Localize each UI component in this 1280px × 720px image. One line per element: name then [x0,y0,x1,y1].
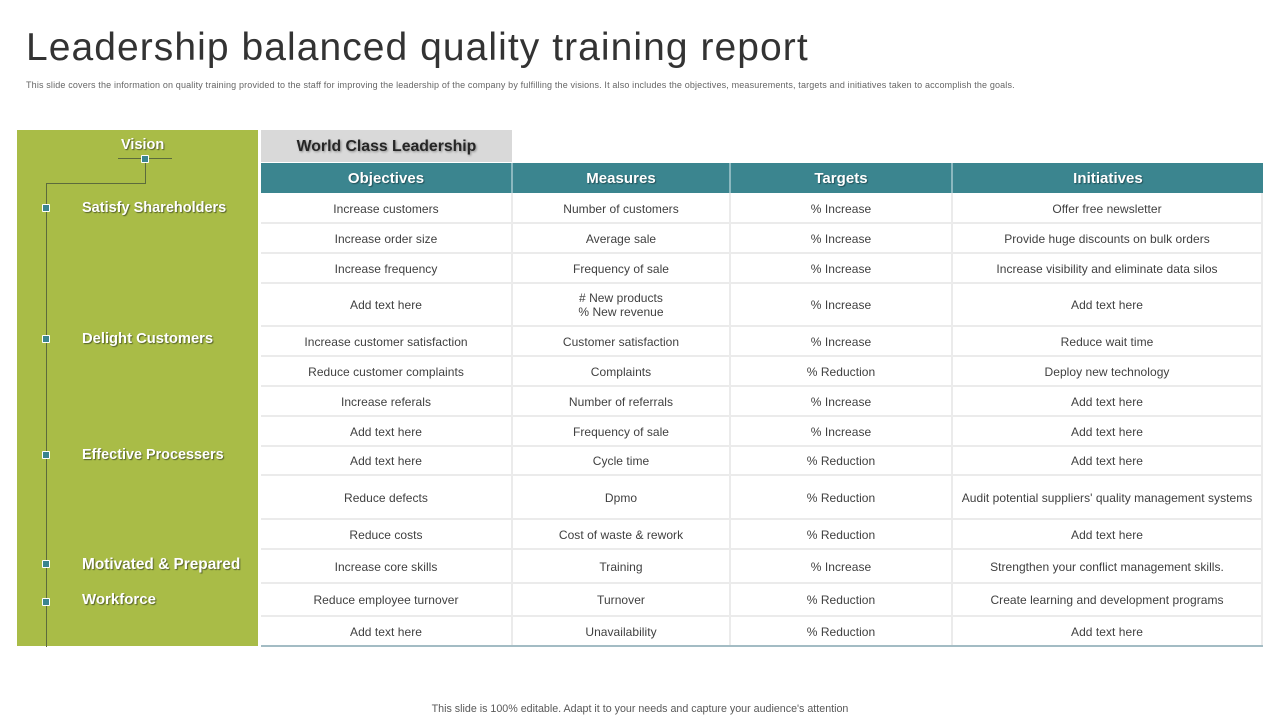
row 6 [261,356,1263,387]
row 6: % Reduction [807,364,875,378]
row 2: Provide huge discounts on bulk orders [1004,232,1210,246]
vision heading: Vision [121,137,164,153]
row 10: Dpmo [605,490,637,504]
row 13 [261,583,1263,617]
row 4: % New revenue [578,305,664,319]
row 3: Increase frequency [335,262,437,276]
row 14: Add text here [350,624,422,638]
header: targets [731,163,953,193]
row 12 [261,549,1263,584]
row 6: Deploy new technology [1045,364,1169,378]
row 11: Reduce costs [349,528,423,542]
row 9: Add text here [1071,454,1143,468]
row 8 [261,416,1263,447]
row 12: Strengthen your conflict management skills. [990,560,1224,574]
row 10 [261,475,1263,520]
row 4: Add text here [1071,298,1143,312]
row 10: Audit potential suppliers' quality management systems [962,490,1252,504]
row 3 [261,253,1263,284]
node: effective processers [42,451,50,459]
row 2 [261,223,1263,254]
row 13: Reduce employee turnover [313,593,459,607]
label: workforce: Workforce [82,591,156,608]
row 11: Cost of waste & rework [559,528,683,542]
row 12: Increase core skills [335,560,437,574]
row 7: Add text here [1071,394,1143,408]
row 9: Cycle time [593,454,649,468]
header: objectives: Objectives [348,170,424,187]
row 1: % Increase [811,202,871,216]
row 3: Frequency of sale [573,262,669,276]
row 11: Add text here [1071,528,1143,542]
row 7: % Increase [811,394,871,408]
row 14: % Reduction [807,624,875,638]
row 2: Increase order size [335,232,437,246]
row 13: Turnover [597,593,645,607]
row 14: Add text here [1071,624,1143,638]
row 10: Reduce defects [344,490,428,504]
header: objectives [261,163,513,193]
row 7: Increase referals [341,394,431,408]
row 4 [261,283,1263,327]
row 8: Frequency of sale [573,424,669,438]
row 1: Number of customers [563,202,679,216]
row 3: Increase visibility and eliminate data silos [996,262,1218,276]
row 5 [261,326,1263,357]
heading: world class leadership: World Class Leadership [297,138,476,155]
row 7: Number of referrals [569,394,673,408]
row 1: Increase customers [333,202,439,216]
row 9 [261,446,1263,476]
node: workforce [42,598,50,606]
label: delight customers: Delight Customers [82,331,213,347]
row 1 [261,193,1263,224]
label: effective processers: Effective Processers [82,447,224,463]
row 5: % Increase [811,334,871,348]
vision underline [118,158,172,159]
header: initiatives: Initiatives [1073,170,1143,187]
footer note: This slide is 100% editable. Adapt it to your needs and capture your audience's attention [432,703,848,715]
node: motivated and prepared [42,560,50,568]
row 12: % Increase [811,560,871,574]
connector: timeline [46,183,47,647]
row 5: Reduce wait time [1061,334,1153,348]
row 4: # New products [579,291,663,305]
row 11 [261,519,1263,550]
row 2: Average sale [586,232,656,246]
connector: horizontal [46,183,146,184]
row 2: % Increase [811,232,871,246]
header: measures: Measures [586,170,656,187]
row 13: Create learning and development programs [990,593,1224,607]
row 4: % Increase [811,298,871,312]
panel: vision [17,130,258,646]
row 1: Offer free newsletter [1052,202,1162,216]
connector: vision stem [145,158,146,184]
row 13: % Reduction [807,593,875,607]
title: Leadership balanced quality training report [26,26,809,69]
row 14: Unavailability [585,624,657,638]
row 10: % Reduction [807,490,875,504]
row 4: Add text here [350,298,422,312]
table header [261,163,1263,193]
row 8: Add text here [350,424,422,438]
row 6: Complaints [591,364,651,378]
row 14 [261,616,1263,647]
row 6: Reduce customer complaints [308,364,464,378]
subtitle description: This slide covers the information on quality training provided to the staff for improving the leadership of the company by fulfilling the visions. It also includes the objectives, measurements, targets and initiatives taken to accomplish the goals. [26,80,1015,90]
row 5: Increase customer satisfaction [304,334,468,348]
heading: world class leadership [261,130,512,162]
row 5: Customer satisfaction [563,334,679,348]
row 8: Add text here [1071,424,1143,438]
header: measures [513,163,731,193]
header: targets: Targets [814,170,868,187]
node: satisfy shareholders [42,204,50,212]
node: vision [141,155,149,163]
row 11: % Reduction [807,528,875,542]
row 9: % Reduction [807,454,875,468]
row 12: Training [599,560,643,574]
label: motivated and prepared: Motivated & Prepared [82,556,240,573]
label: satisfy shareholders: Satisfy Shareholders [82,200,226,216]
row 9: Add text here [350,454,422,468]
row 3: % Increase [811,262,871,276]
row 8: % Increase [811,424,871,438]
row 7 [261,386,1263,417]
node: delight customers [42,335,50,343]
